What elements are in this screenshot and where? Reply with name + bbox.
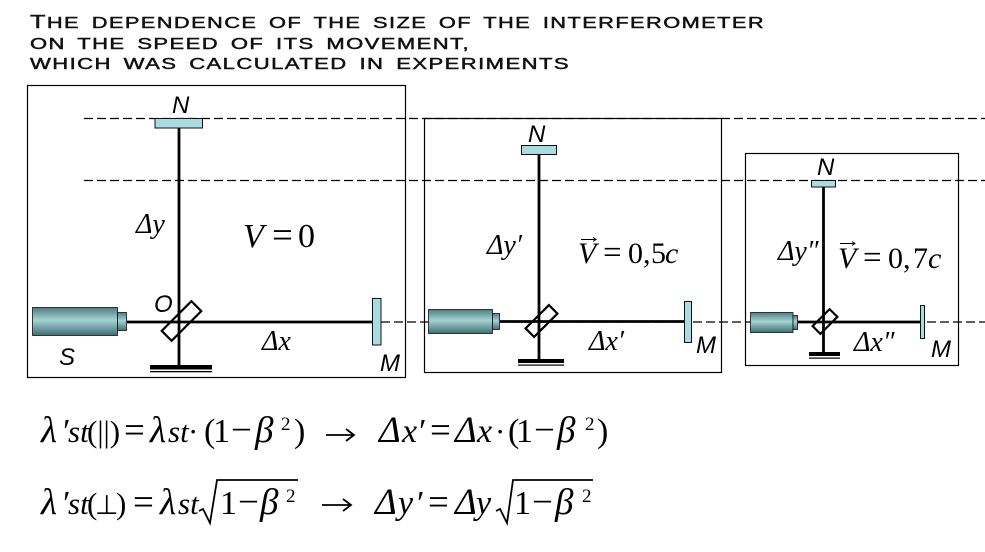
formula: parallel contraction: − xyxy=(231,410,252,451)
label O: O xyxy=(154,291,173,318)
formula: perpendicular contraction: 2 xyxy=(582,486,592,507)
mirror N xyxy=(522,146,556,154)
formula: perpendicular contraction: − xyxy=(532,482,553,523)
panel: V = 0.7c xyxy=(746,154,958,366)
formula: perpendicular contraction: ) xyxy=(116,486,126,521)
label M: M xyxy=(696,332,716,359)
formula: parallel contraction: (||) xyxy=(87,414,120,449)
speed label: , xyxy=(643,237,650,270)
label delta y prime: Δy′ xyxy=(486,230,523,261)
speed label: V xyxy=(838,242,860,275)
formula: perpendicular contraction: = xyxy=(428,482,449,523)
formula: parallel contraction: − xyxy=(534,410,555,451)
formula: parallel contraction: 2 xyxy=(281,414,290,435)
formula: perpendicular contraction: 1 xyxy=(514,485,531,522)
formula: parallel contraction: β xyxy=(556,410,576,451)
label delta x double prime: Δx″ xyxy=(853,327,895,358)
label N: N xyxy=(172,92,190,119)
formula: perpendicular contraction: y xyxy=(395,485,414,522)
formula: perpendicular contraction: y xyxy=(473,485,492,522)
reference dashed lines xyxy=(84,118,985,322)
formula: parallel contraction: · xyxy=(188,414,198,449)
speed label: 7 xyxy=(913,242,928,275)
formula: parallel contraction: = xyxy=(430,410,451,451)
formula: perpendicular contraction: 1 xyxy=(220,485,237,522)
label M: M xyxy=(380,350,400,377)
label delta x: Δx xyxy=(261,326,291,357)
mirror N xyxy=(812,180,836,187)
formula: parallel contraction xyxy=(40,410,608,451)
formula: perpendicular contraction: ′ xyxy=(415,485,423,522)
formula: perpendicular contraction: ′ xyxy=(61,485,69,522)
formula: perpendicular contraction: Δ xyxy=(453,482,477,523)
formula: parallel contraction: ′ xyxy=(417,413,425,450)
label delta y: Δy xyxy=(135,209,165,240)
light rays xyxy=(127,128,372,366)
formula: parallel contraction: ′ xyxy=(61,413,69,450)
formula: parallel contraction: ( xyxy=(508,413,519,450)
formula: perpendicular contraction: 2 xyxy=(286,486,296,507)
speed label xyxy=(578,235,678,271)
formula: parallel contraction: Δ xyxy=(377,410,401,451)
speed label: c xyxy=(928,242,941,275)
speed label: 0 xyxy=(298,218,315,255)
speed label: 5 xyxy=(651,237,666,270)
mirror N xyxy=(155,118,202,128)
formula: parallel contraction: λ xyxy=(40,410,57,451)
formula: parallel contraction: x xyxy=(476,413,492,450)
formula: parallel contraction: · xyxy=(495,414,505,449)
formula: perpendicular contraction: Δ xyxy=(373,482,397,523)
arrow xyxy=(326,429,354,441)
beam splitter xyxy=(813,309,837,334)
light source xyxy=(750,312,798,332)
formula: perpendicular contraction: β xyxy=(259,482,279,523)
light source xyxy=(32,308,126,336)
beam splitter xyxy=(162,301,201,341)
label S: S xyxy=(59,344,75,371)
formula: parallel contraction: st xyxy=(68,414,90,449)
beam splitter xyxy=(526,305,557,337)
formula: perpendicular contraction xyxy=(40,480,593,523)
formula: perpendicular contraction: λ xyxy=(159,482,176,523)
arrow xyxy=(322,499,351,511)
formula: perpendicular contraction: λ xyxy=(40,482,57,523)
formula: parallel contraction: ) xyxy=(294,413,305,450)
formula: perpendicular contraction: st xyxy=(68,486,90,521)
speed label: 0 xyxy=(628,237,643,270)
formula: parallel contraction: st xyxy=(168,414,190,449)
formula: perpendicular contraction: ⊥ xyxy=(95,490,119,520)
formula: perpendicular contraction: = xyxy=(133,482,154,523)
speed label: V xyxy=(243,218,268,255)
mirror M xyxy=(684,302,692,342)
formula: perpendicular contraction: ( xyxy=(87,486,97,521)
formula: perpendicular contraction: st xyxy=(178,486,200,521)
mirror M xyxy=(372,298,381,345)
speed label: = xyxy=(603,235,622,271)
speed label: c xyxy=(665,237,678,270)
formula: parallel contraction: 1 xyxy=(516,413,533,450)
formula: parallel contraction: β xyxy=(254,410,274,451)
formula: parallel contraction: λ xyxy=(149,410,166,451)
panel: V = 0 xyxy=(28,86,406,378)
compensating mirror xyxy=(809,352,840,359)
formula: perpendicular contraction: − xyxy=(238,482,259,523)
formula: parallel contraction: 2 xyxy=(585,414,594,435)
title: ON THE SPEED OF ITS MOVEMENT, xyxy=(30,36,470,53)
speed label: = xyxy=(272,215,293,256)
compensating mirror xyxy=(150,365,212,372)
mirror M xyxy=(920,306,924,338)
formula: parallel contraction: ) xyxy=(597,413,608,450)
speed label: 0 xyxy=(888,242,903,275)
light rays xyxy=(500,154,685,359)
title: WHICH WAS CALCULATED IN EXPERIMENTS xyxy=(30,56,570,73)
label N: N xyxy=(817,154,835,181)
label N: N xyxy=(528,121,546,148)
panel: V = 0.5c xyxy=(424,118,722,372)
compensating mirror xyxy=(518,359,564,366)
title: T HE DEPENDENCE OF THE SIZE OF THE INTERFEROMETER xyxy=(30,12,765,32)
light rays xyxy=(797,187,921,352)
light source xyxy=(428,310,500,334)
speed label: V xyxy=(578,237,600,270)
label delta y double prime: Δy″ xyxy=(777,236,819,267)
formula: parallel contraction: x xyxy=(401,413,417,450)
formula: parallel contraction: ( xyxy=(204,413,215,450)
speed label: , xyxy=(903,242,910,275)
title xyxy=(30,12,765,73)
speed label xyxy=(838,240,941,276)
label M: M xyxy=(931,336,951,363)
speed label: = xyxy=(863,240,882,276)
formula: perpendicular contraction: β xyxy=(554,482,574,523)
formula: parallel contraction: = xyxy=(124,410,145,451)
formula: parallel contraction: 1 xyxy=(213,413,230,450)
label delta x prime: Δx′ xyxy=(588,326,625,357)
formula: parallel contraction: Δ xyxy=(453,410,477,451)
